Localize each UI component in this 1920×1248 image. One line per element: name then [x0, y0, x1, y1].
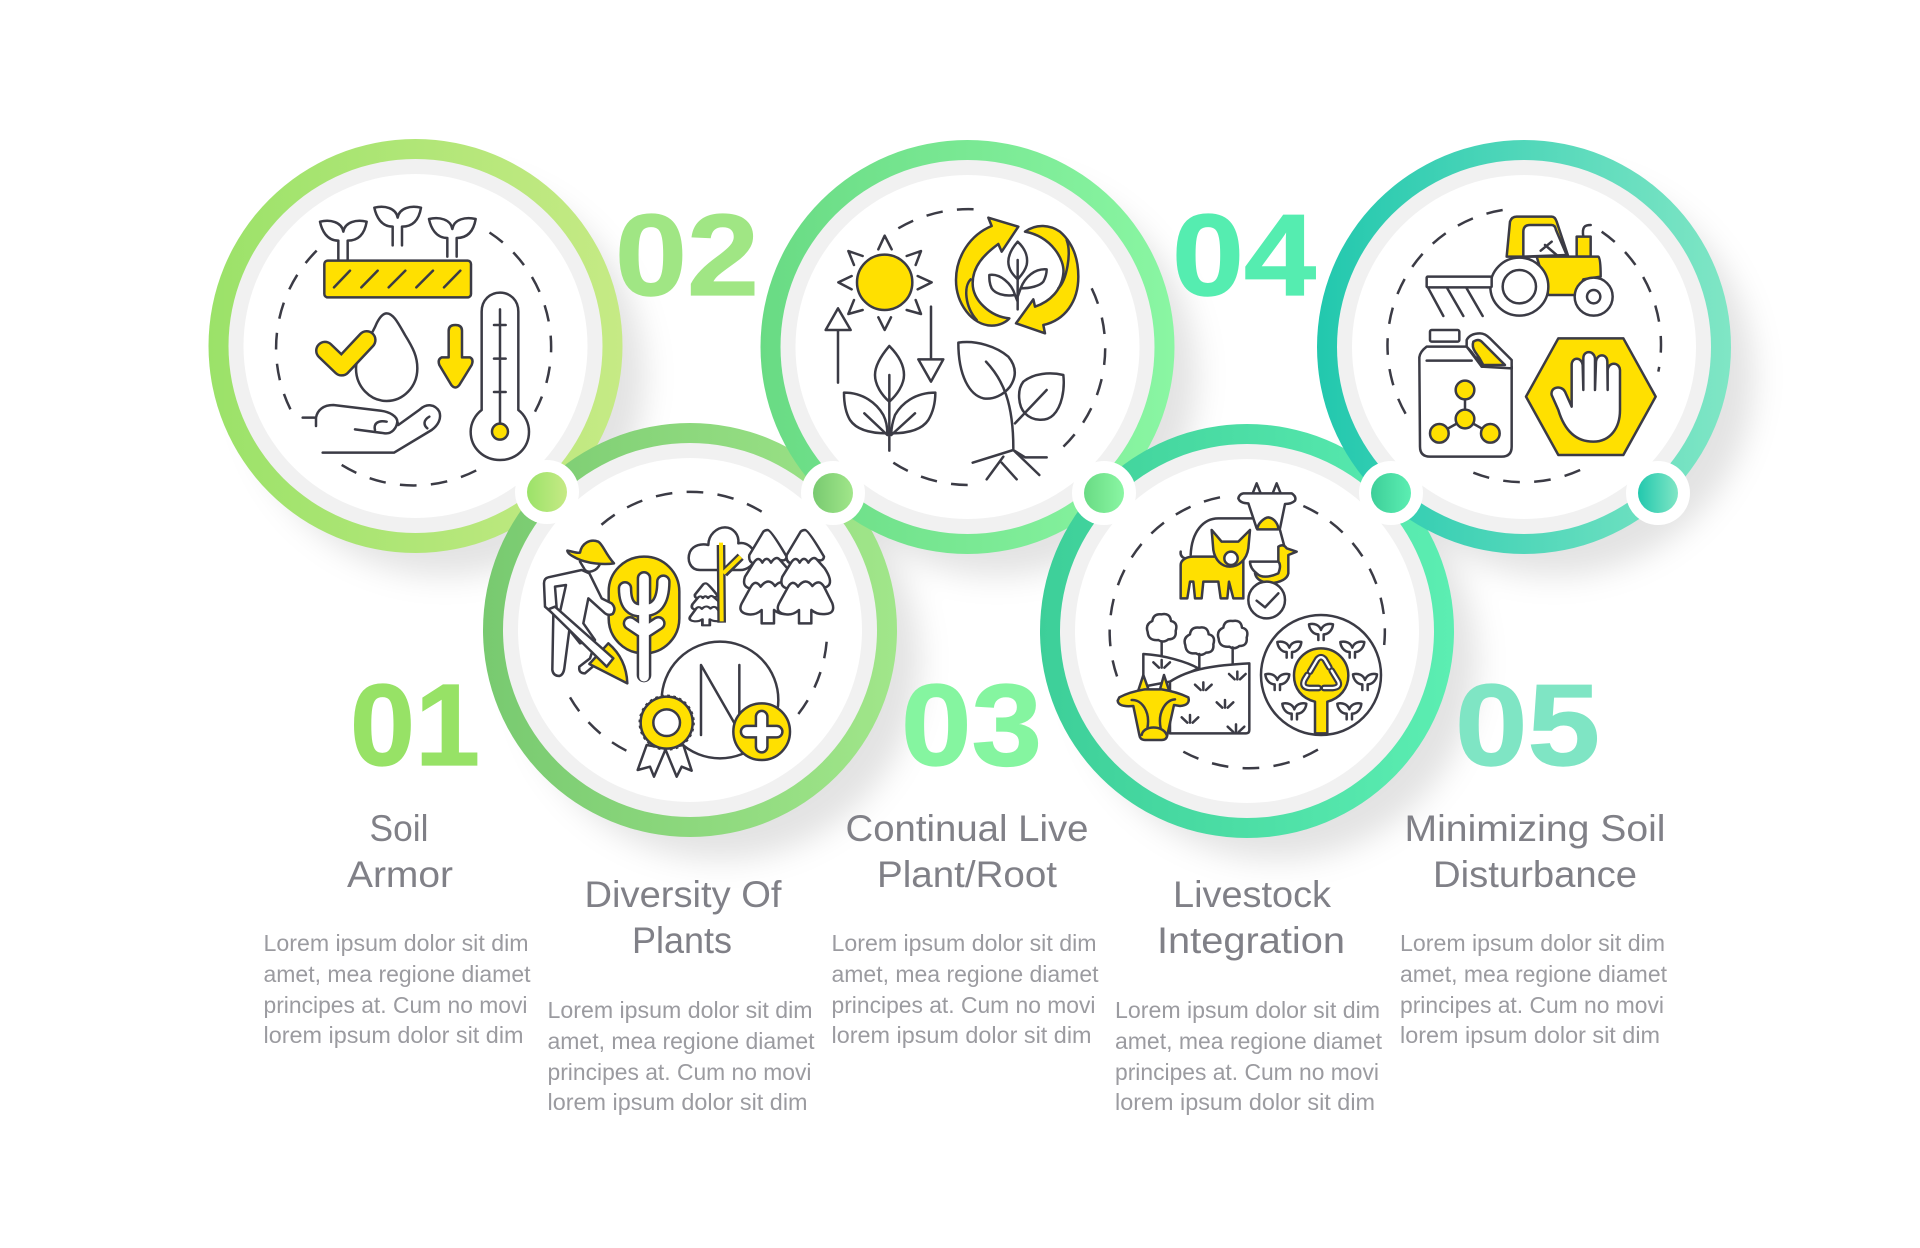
body text 3: Lorem ipsum dolor sit dim [832, 930, 1096, 956]
connector dot 1 [515, 460, 579, 524]
icon: livestock integration [1110, 483, 1385, 768]
body text 4: Lorem ipsum dolor sit dim [1115, 997, 1380, 1023]
body text 1: principes at. Cum no movi [264, 992, 528, 1018]
body text 5: Lorem ipsum dolor sit dim [1400, 930, 1665, 956]
icon: soil armor [276, 207, 551, 485]
icon: diversity of plants [544, 492, 833, 777]
connector dot 5 [1626, 461, 1690, 525]
body text 2: lorem ipsum dolor sit dim [548, 1089, 808, 1115]
body text 5: principes at. Cum no movi [1400, 992, 1664, 1018]
heading: minimizing soil disturbance: Minimizing Soil [1404, 808, 1666, 849]
body text 3: principes at. Cum no movi [832, 992, 1096, 1018]
icon: continual live plant and root [826, 209, 1105, 485]
icon: minimizing soil disturbance [1387, 210, 1661, 482]
body text 2: Lorem ipsum dolor sit dim [548, 997, 812, 1023]
heading: diversity of plants: Diversity Of [584, 874, 782, 915]
body text 3: lorem ipsum dolor sit dim [832, 1022, 1092, 1048]
number 05: 05 [1455, 660, 1600, 790]
heading: continual live plant/root: Plant/Root [877, 854, 1058, 895]
number 03: 03 [901, 660, 1042, 790]
body text 3: amet, mea regione diamet [832, 961, 1099, 987]
panel: circle 4 livestock integration [1040, 190, 1454, 1115]
body text 4: principes at. Cum no movi [1115, 1059, 1379, 1085]
body text 5: amet, mea regione diamet [1400, 961, 1667, 987]
number 04: 04 [1172, 190, 1316, 320]
body text 2: principes at. Cum no movi [548, 1059, 812, 1085]
connector dot 2 [801, 461, 865, 525]
body text 1: amet, mea regione diamet [264, 961, 531, 987]
number 01: 01 [350, 660, 480, 790]
body text 4: amet, mea regione diamet [1115, 1028, 1382, 1054]
heading: minimizing soil disturbance: Disturbance [1433, 854, 1637, 895]
heading: livestock integration: Integration [1157, 920, 1345, 961]
panel: circle 3 continual live plant/root [760, 140, 1174, 1048]
heading: diversity of plants: Plants [632, 920, 732, 961]
heading: continual live plant/root: Continual Live [846, 808, 1088, 849]
connector dot 3 [1072, 461, 1136, 525]
panel: circle 2 diversity of plants [483, 190, 897, 1115]
body text 5: lorem ipsum dolor sit dim [1400, 1022, 1660, 1048]
body text 1: lorem ipsum dolor sit dim [264, 1022, 524, 1048]
panel: circle 5 minimizing soil disturbance [1317, 140, 1731, 1048]
connector dot 4 [1359, 461, 1423, 525]
body text 1: Lorem ipsum dolor sit dim [264, 930, 528, 956]
heading: soil armor: Soil [370, 808, 428, 849]
heading: soil armor: Armor [347, 854, 453, 895]
heading: livestock integration: Livestock [1173, 874, 1332, 915]
body text 4: lorem ipsum dolor sit dim [1115, 1089, 1375, 1115]
panel: circle 1 soil armor [208, 139, 622, 1048]
body text 2: amet, mea regione diamet [548, 1028, 815, 1054]
soft circle shadows [245, 176, 1754, 860]
number 02: 02 [615, 190, 759, 320]
